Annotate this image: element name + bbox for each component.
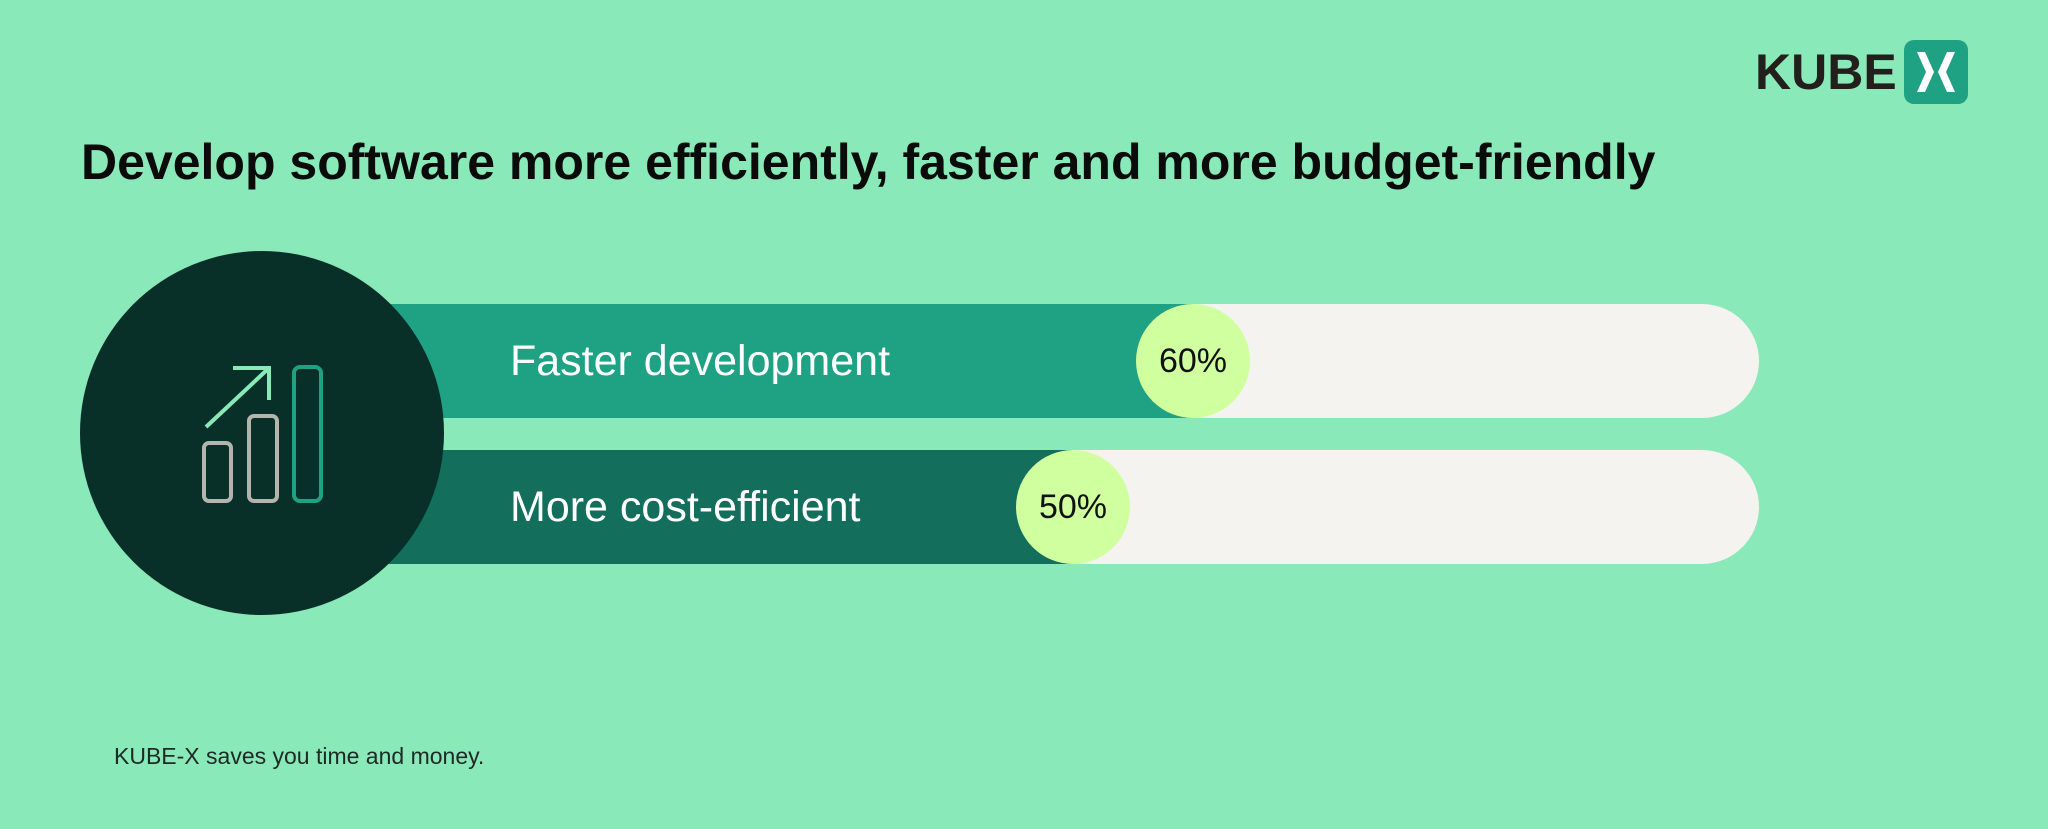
logo xyxy=(1755,40,1968,104)
title: Develop software more efficiently, faster and more budget-friendly xyxy=(81,134,1655,190)
badge 50%: 50% xyxy=(1039,488,1107,526)
label: More cost-efficient xyxy=(510,483,861,531)
icon: growth chart xyxy=(202,365,323,503)
logo text: KUBE xyxy=(1755,44,1897,100)
badge 60%: 60% xyxy=(1159,342,1227,380)
icon circle xyxy=(80,251,444,615)
logo mark xyxy=(1904,40,1968,104)
bar: more cost-efficient xyxy=(388,450,1759,564)
badge 60% xyxy=(1136,304,1250,418)
bar: faster development xyxy=(390,304,1759,418)
footer note: KUBE-X saves you time and money. xyxy=(114,743,484,769)
badge 50% xyxy=(1016,450,1130,564)
label: Faster development xyxy=(510,337,890,385)
